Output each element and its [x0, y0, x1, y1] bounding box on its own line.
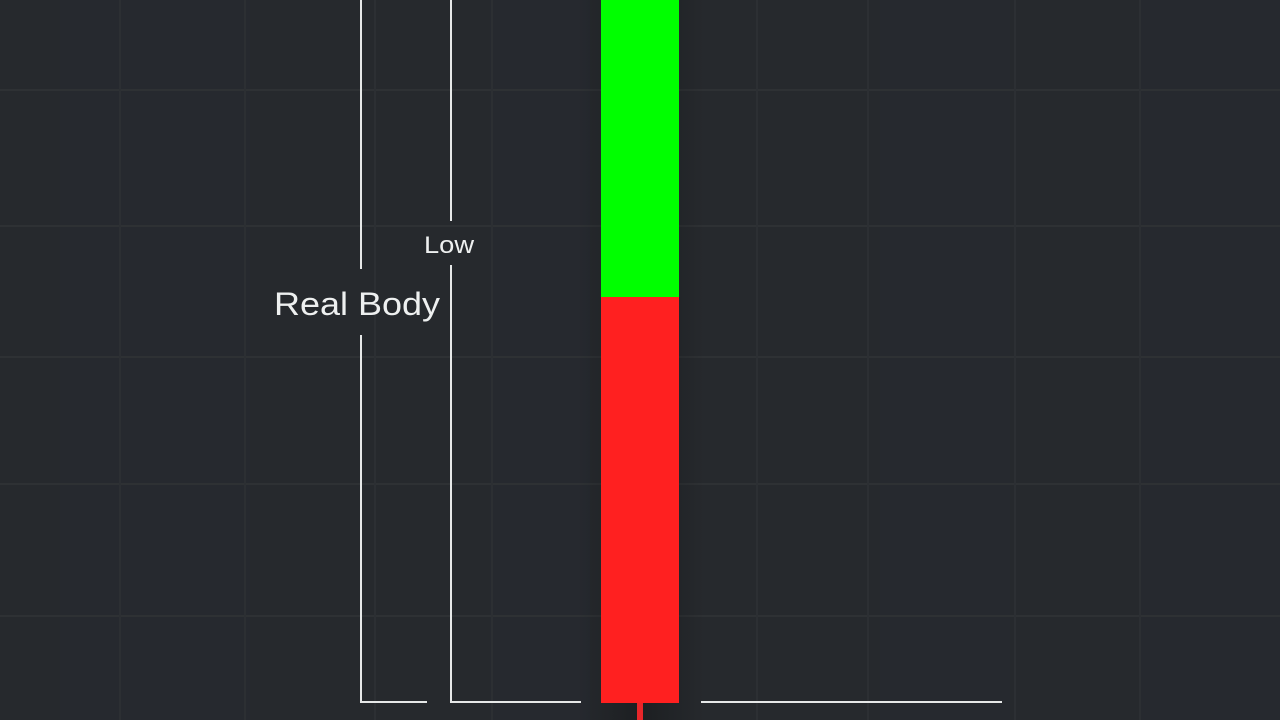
bearish red body [601, 297, 679, 703]
label: Low: Low [424, 232, 475, 259]
candle lower wick [637, 703, 643, 720]
real body bracket [361, 0, 427, 702]
label: Real Body: Real Body [274, 286, 440, 322]
bullish green body [601, 0, 679, 297]
baseline right of candle [701, 701, 1002, 703]
low bracket [451, 0, 581, 702]
